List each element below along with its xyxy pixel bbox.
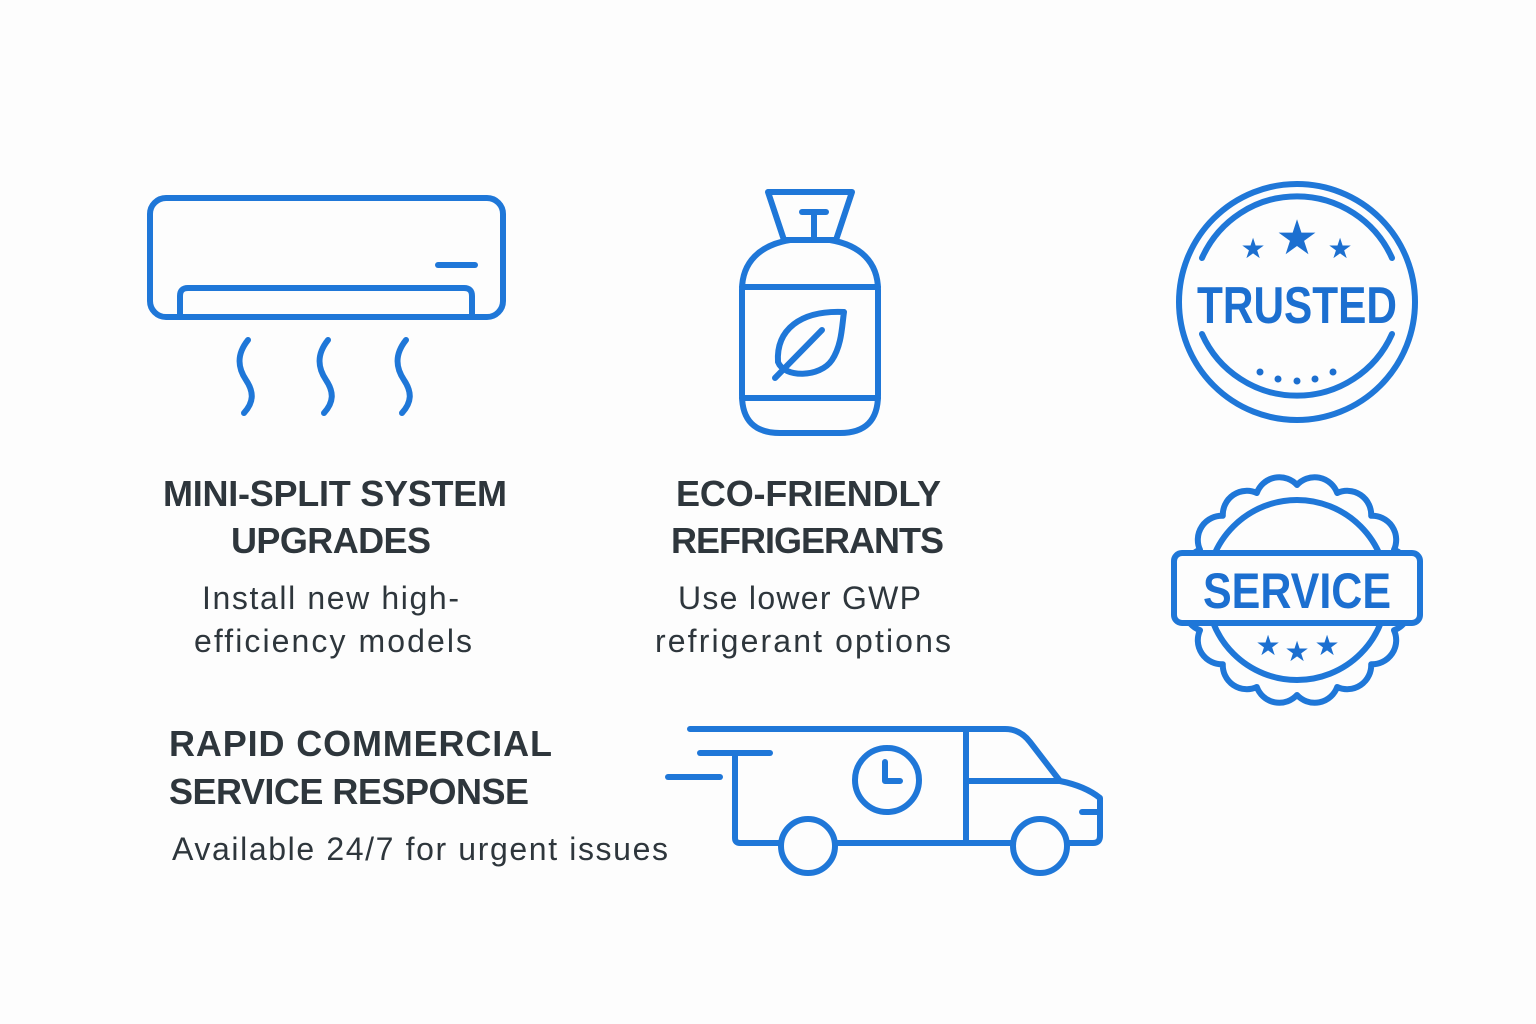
- badge: service: ★: [1284, 635, 1310, 668]
- text: eco-friendly heading: REFRIGERANTS: [671, 520, 944, 561]
- badge: trusted: ★: [1240, 232, 1266, 265]
- text: rapid service: RAPID COMMERCIAL: [169, 723, 552, 764]
- icon: refrigerant cylinder with leaf: [742, 192, 878, 433]
- text: rapid service: SERVICE RESPONSE: [169, 771, 529, 812]
- badge: trusted: [1179, 184, 1415, 420]
- badge: trusted: TRUSTED: [1197, 277, 1397, 335]
- text: eco-friendly heading: ECO-FRIENDLY: [676, 473, 941, 514]
- badge: service: ★: [1255, 629, 1281, 662]
- badge: trusted: ★: [1327, 232, 1353, 265]
- text: mini-split heading: [163, 473, 507, 659]
- icon: delivery truck with clock: [668, 729, 1100, 873]
- text: mini-split heading: Install new high-: [202, 580, 459, 616]
- text: mini-split heading: UPGRADES: [231, 520, 431, 561]
- text: mini-split heading: MINI-SPLIT SYSTEM: [163, 473, 507, 514]
- text: eco-friendly heading: [655, 473, 951, 659]
- badge: trusted: ★: [1275, 210, 1319, 266]
- text: mini-split heading: efficiency models: [194, 623, 472, 659]
- text: rapid service: [169, 723, 668, 867]
- badge: service: ★: [1314, 629, 1340, 662]
- text: eco-friendly heading: refrigerant options: [655, 623, 951, 659]
- badge: service: [1174, 477, 1420, 703]
- text: rapid service: Available 24/7 for urgent issues: [172, 831, 668, 867]
- badge: service: SERVICE: [1203, 563, 1391, 619]
- icon: mini-split air conditioner: [150, 198, 503, 413]
- text: eco-friendly heading: Use lower GWP: [678, 580, 921, 616]
